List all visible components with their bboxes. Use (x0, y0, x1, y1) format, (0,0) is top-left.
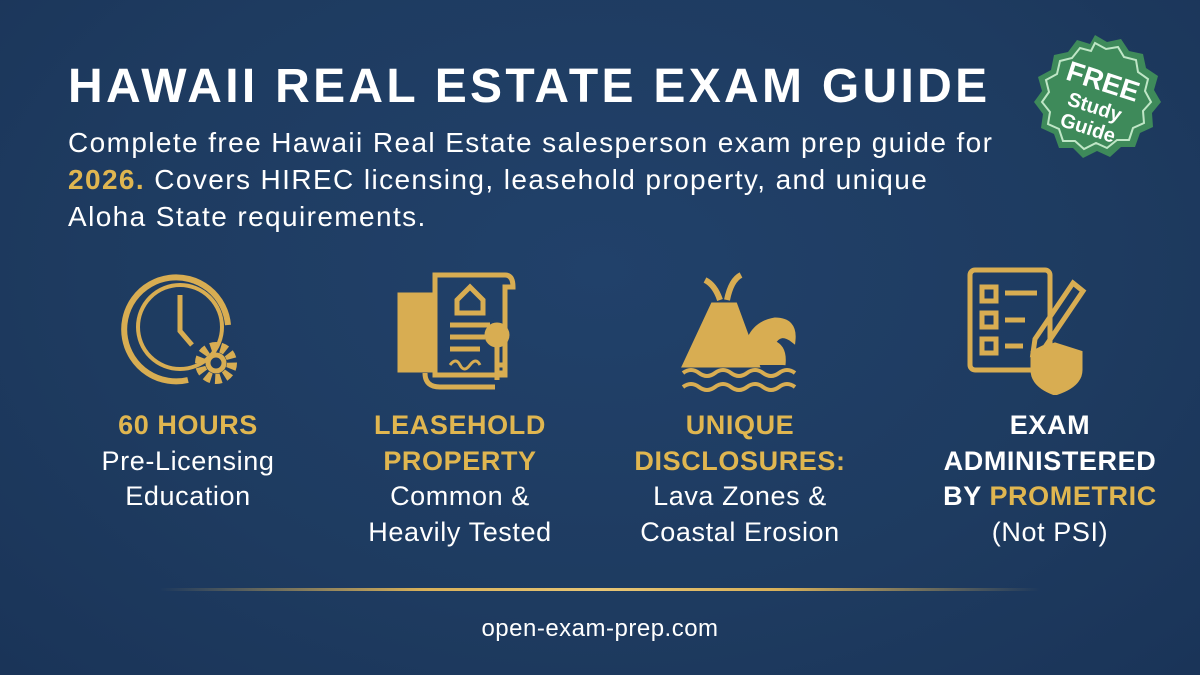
column 4 label: EXAM (1010, 410, 1090, 440)
column 4 label: BY PROMETRIC (943, 481, 1157, 511)
subtitle text: 2026. Covers HIREC licensing, leasehold property, and unique (68, 164, 928, 195)
icon: volcano and wave (681, 272, 796, 392)
column 4 label: (Not PSI) (992, 516, 1108, 546)
column 3 label: Lava Zones & (653, 481, 827, 511)
column 1 label: Education (125, 481, 251, 511)
column 1 label: 60 HOURS (118, 410, 258, 440)
column 4 label (943, 410, 1157, 546)
icon: checklist with pencil and shield (968, 268, 1086, 395)
badge: free study guide: FREE (1063, 55, 1143, 108)
column 3 label: Coastal Erosion (640, 516, 840, 546)
column 2 label: Heavily Tested (368, 516, 552, 546)
subtitle text: Aloha State requirements. (68, 201, 427, 232)
icon: clock with gear (121, 274, 237, 384)
column 2 label: LEASEHOLD (374, 410, 546, 440)
column 1 label (102, 410, 274, 511)
column 2 label: Common & (390, 481, 530, 511)
badge: free study guide: Guide (1057, 109, 1118, 148)
column 4 label: ADMINISTERED (944, 446, 1156, 476)
badge: free study guide (1034, 35, 1161, 158)
column 3 label (634, 410, 846, 546)
subtitle text: Complete free Hawaii Real Estate salesperson exam prep guide for (68, 127, 993, 158)
title: HAWAII REAL ESTATE EXAM GUIDE (68, 60, 990, 113)
column 3 label: UNIQUE (686, 410, 794, 440)
column 2 label: PROPERTY (383, 446, 537, 476)
footer url: open-exam-prep.com (481, 615, 719, 642)
column 1 label: Pre-Licensing (102, 446, 274, 476)
column 2 label (368, 410, 552, 546)
icon: leasehold building and deed with key (398, 272, 516, 390)
badge: free study guide: Study (1065, 89, 1125, 127)
subtitle text (68, 127, 993, 232)
column 3 label: DISCLOSURES: (634, 446, 846, 476)
